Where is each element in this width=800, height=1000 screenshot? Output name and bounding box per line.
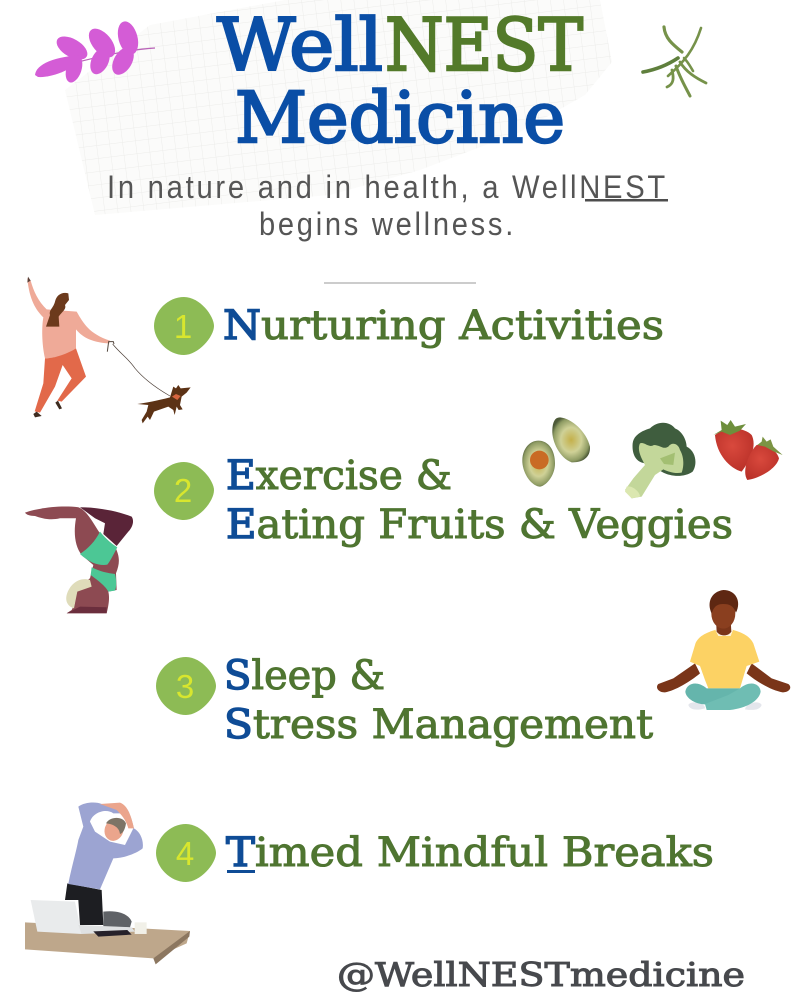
broccoli <box>625 423 695 498</box>
step 3 badge: 3 <box>176 668 194 705</box>
avocados <box>522 417 590 487</box>
step 2 badge: 2 <box>174 472 192 509</box>
subtitle: begins wellness. <box>259 206 516 242</box>
icon: meditating man <box>657 590 790 710</box>
step 4 label: Timed Mindful Breaks <box>226 830 714 876</box>
step 3 label: Stress Management <box>224 702 653 748</box>
subtitle: In nature and in health, a WellNEST <box>107 169 668 205</box>
title <box>217 3 583 87</box>
step 3 label <box>224 653 653 748</box>
icon: pink leaf sprig <box>35 19 155 85</box>
title: NEST <box>385 3 583 87</box>
icon: green rosemary sprig <box>643 27 706 96</box>
step 3 badge <box>156 657 216 715</box>
subtitle <box>107 169 668 242</box>
step 4 badge <box>156 824 216 882</box>
step 2 label: Eating Fruits & Veggies <box>226 502 733 548</box>
step 1 badge: 1 <box>174 308 192 345</box>
title second line: Medicine <box>235 77 565 159</box>
step 4 badge: 4 <box>176 835 194 872</box>
icon: man stretching at desk <box>25 802 190 964</box>
graph paper background <box>65 0 612 215</box>
step 1 label: Nurturing Activities <box>223 303 664 349</box>
icon: woman in headstand pose <box>25 507 133 613</box>
title: Well <box>217 3 383 87</box>
step 2 label <box>226 453 733 548</box>
step 2 label: Exercise & <box>226 453 452 499</box>
social handle: @WellNESTmedicine <box>337 955 745 994</box>
strawberries <box>713 420 783 480</box>
step 1 badge <box>154 297 214 355</box>
step 3 label: Sleep & <box>224 653 385 699</box>
icon: woman walking dog <box>27 277 191 423</box>
icon: avocado, broccoli, strawberries <box>522 417 783 498</box>
step 2 badge <box>154 462 214 520</box>
